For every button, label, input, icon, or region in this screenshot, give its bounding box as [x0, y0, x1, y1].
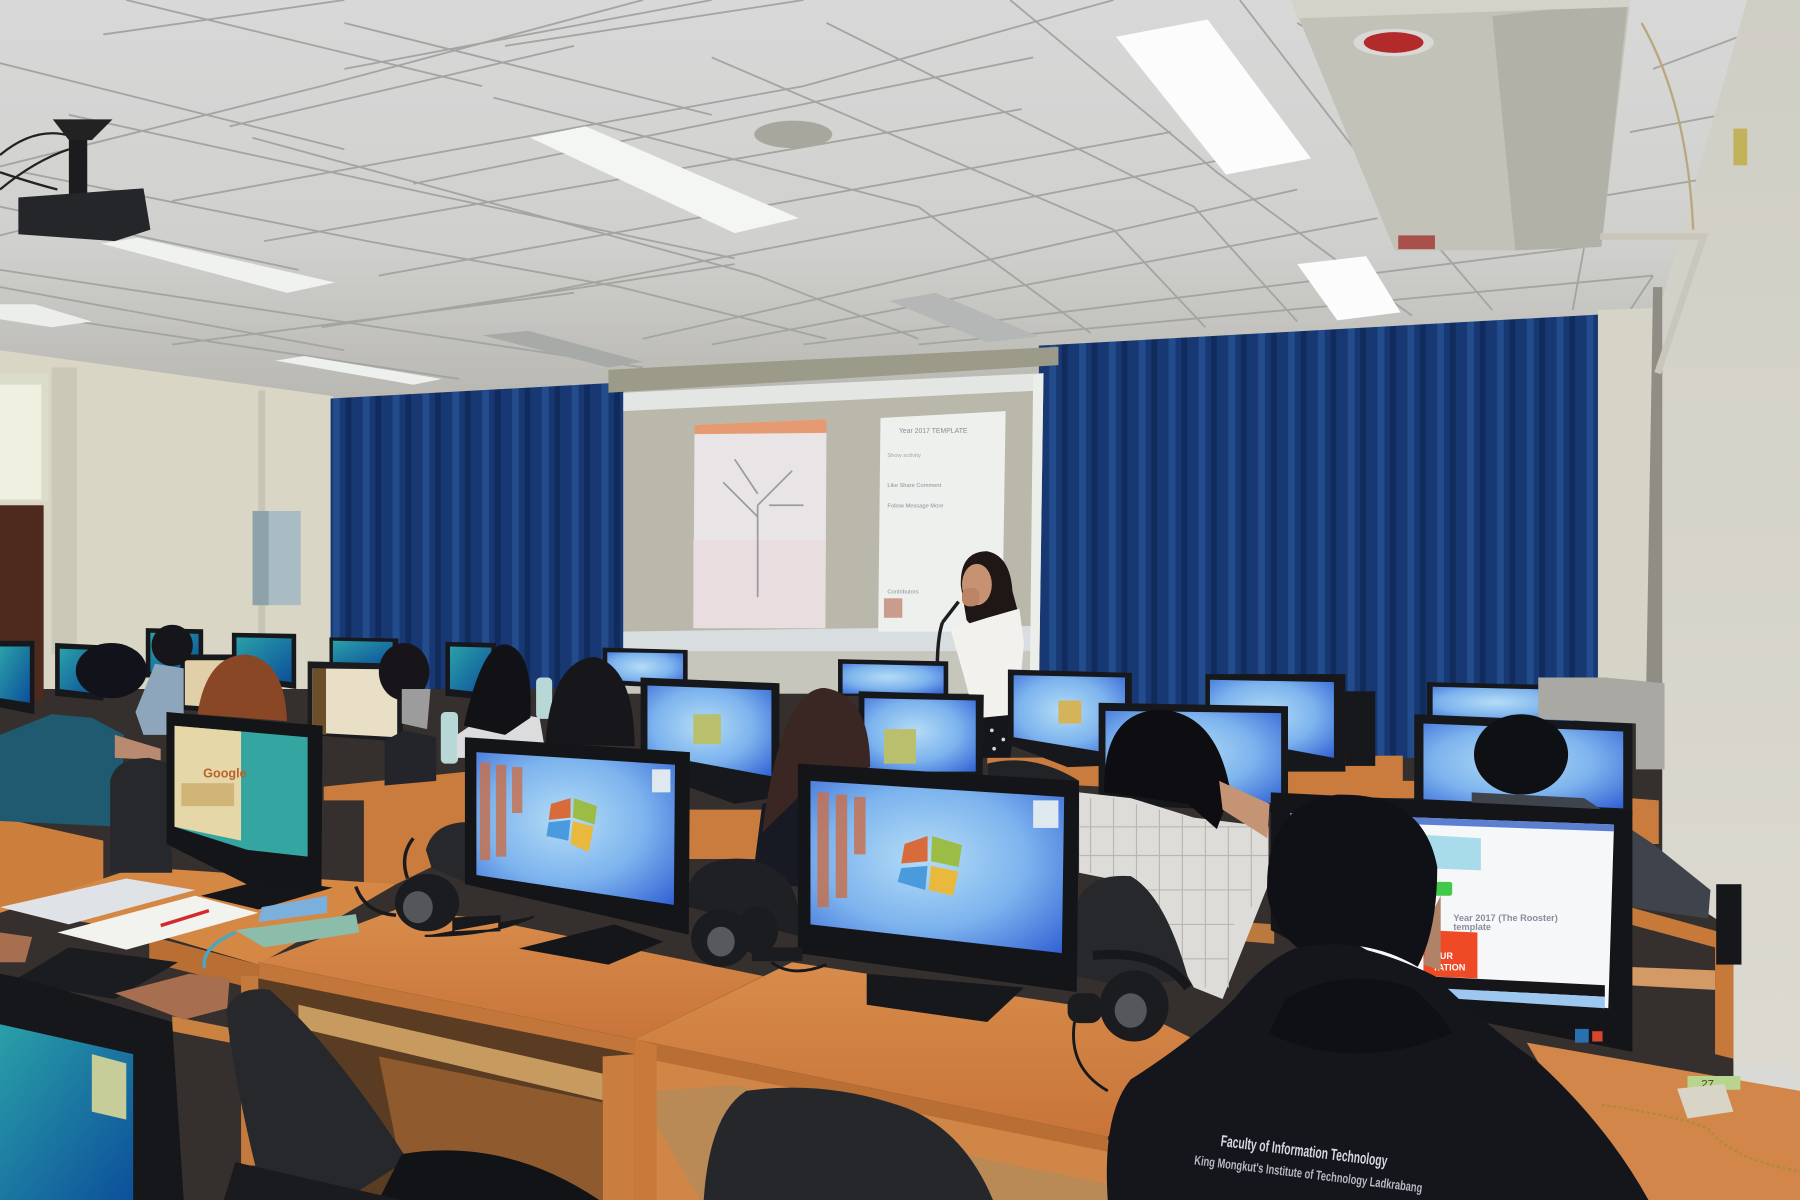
- person: woman with dark hair near screen: [379, 643, 430, 729]
- right wall: [1600, 0, 1800, 1070]
- monitor 6: [329, 637, 398, 668]
- office chair right: [1076, 876, 1188, 988]
- hoodie print: Faculty of Information Technology: [1220, 1132, 1388, 1170]
- monitor 11: [1205, 674, 1345, 772]
- monitor far left: [0, 641, 34, 714]
- monitor: foreground right with web page: template: [1453, 922, 1491, 932]
- monitor: Google page: Google: [203, 766, 247, 780]
- person: man in blue shirt: [135, 625, 193, 735]
- office chair centre: [689, 859, 798, 936]
- post panel on screen: [878, 411, 1006, 632]
- monitor: foreground right with web page: TATION: [1433, 962, 1465, 972]
- person: woman with brown hair: [197, 655, 287, 721]
- monitor 4: [180, 655, 235, 714]
- papers and books on desk: [0, 878, 258, 950]
- monitor 17: [308, 661, 403, 742]
- floor and shadow backdrop: [0, 683, 1733, 1200]
- blue curtain left: [331, 382, 623, 689]
- monitor 7: [445, 642, 496, 700]
- pale column: [1598, 308, 1662, 689]
- desk row B: [635, 962, 1194, 1200]
- right side desk: [1628, 884, 1741, 1059]
- monitor 14: [859, 691, 984, 776]
- water bottle: [441, 678, 552, 764]
- monitor: Google page: [166, 712, 333, 909]
- post panel on screen: Show activity: [887, 453, 921, 459]
- monitor 15: [1099, 703, 1288, 813]
- air conditioning duct: [1291, 0, 1630, 250]
- post panel on screen: Follow Message More: [887, 504, 943, 510]
- desk row B right section: [1527, 1043, 1800, 1200]
- electrical box: [253, 511, 301, 605]
- left wall: [0, 350, 333, 700]
- monitor 12: [1008, 669, 1132, 767]
- monitor: foreground right with web page: [1271, 792, 1632, 1052]
- second row left desks: [0, 867, 396, 1043]
- headset right: [1068, 954, 1188, 1091]
- hoodie print: [1194, 1132, 1423, 1195]
- keyboard and hand: [0, 932, 230, 1020]
- foreground monitor bottom left: [0, 974, 184, 1200]
- projector: [0, 119, 150, 241]
- monitor: front left: [465, 737, 690, 965]
- person: woman with brown hair in dark top: [752, 688, 872, 890]
- headset centre: [691, 906, 827, 971]
- drawing on screen: [693, 419, 827, 628]
- ceiling speaker: [754, 121, 832, 148]
- ceiling: [0, 0, 1800, 402]
- post panel on screen: Contributors: [887, 590, 919, 596]
- monitor: foreground right with web page: OUR: [1433, 951, 1453, 961]
- person: woman in white shirt: [457, 644, 546, 758]
- desk row B right section: 27: [1701, 1078, 1714, 1090]
- person: man in teal shirt: [0, 643, 161, 827]
- person: woman with black hair centre: [545, 657, 635, 746]
- monitor: front centre: [798, 764, 1079, 1022]
- windows logo: [546, 798, 597, 852]
- projection screen: [608, 347, 1058, 694]
- back row desks: [324, 756, 1659, 884]
- monitor 10: [1427, 682, 1580, 723]
- pencil case: [204, 896, 359, 968]
- desk row A: [241, 909, 763, 1200]
- presenter: [937, 551, 1024, 758]
- desk phone: [385, 730, 436, 785]
- monitor 9: [838, 659, 948, 696]
- monitor 16: [1414, 714, 1632, 815]
- pc tower: [1345, 691, 1375, 766]
- office chair left: [110, 758, 172, 873]
- desktop icons: [817, 792, 866, 907]
- monitor 13: [641, 678, 779, 804]
- office chair foreground centre: [704, 1088, 993, 1200]
- ceiling lights: [0, 20, 1401, 385]
- printer: [1538, 678, 1665, 769]
- post panel on screen: Like Share Comment: [887, 483, 942, 489]
- windows logo: [898, 836, 962, 896]
- left small desk: [0, 818, 103, 907]
- monitor 8: [603, 648, 688, 689]
- post panel on screen: Year 2017 TEMPLATE: [899, 428, 968, 435]
- person: woman in checked shirt: [1079, 710, 1270, 999]
- foreground man in black hoodie: [1107, 795, 1648, 1200]
- office chair foreground left: [224, 989, 599, 1200]
- monitor: foreground right with web page: Year 2017 (The Rooster): [1453, 913, 1558, 923]
- office chair middle left: [426, 822, 471, 884]
- monitor 5: [232, 633, 296, 689]
- small monitors far row: [0, 628, 1665, 815]
- person: man in gray jacket: [1472, 714, 1710, 919]
- headset left: [356, 838, 534, 936]
- office chair back row: [987, 760, 1079, 781]
- rear desk strip behind checked shirt: [1194, 919, 1274, 944]
- monitor 2: [55, 643, 103, 700]
- monitor 3: [146, 628, 203, 678]
- blue curtain right: [1039, 315, 1598, 758]
